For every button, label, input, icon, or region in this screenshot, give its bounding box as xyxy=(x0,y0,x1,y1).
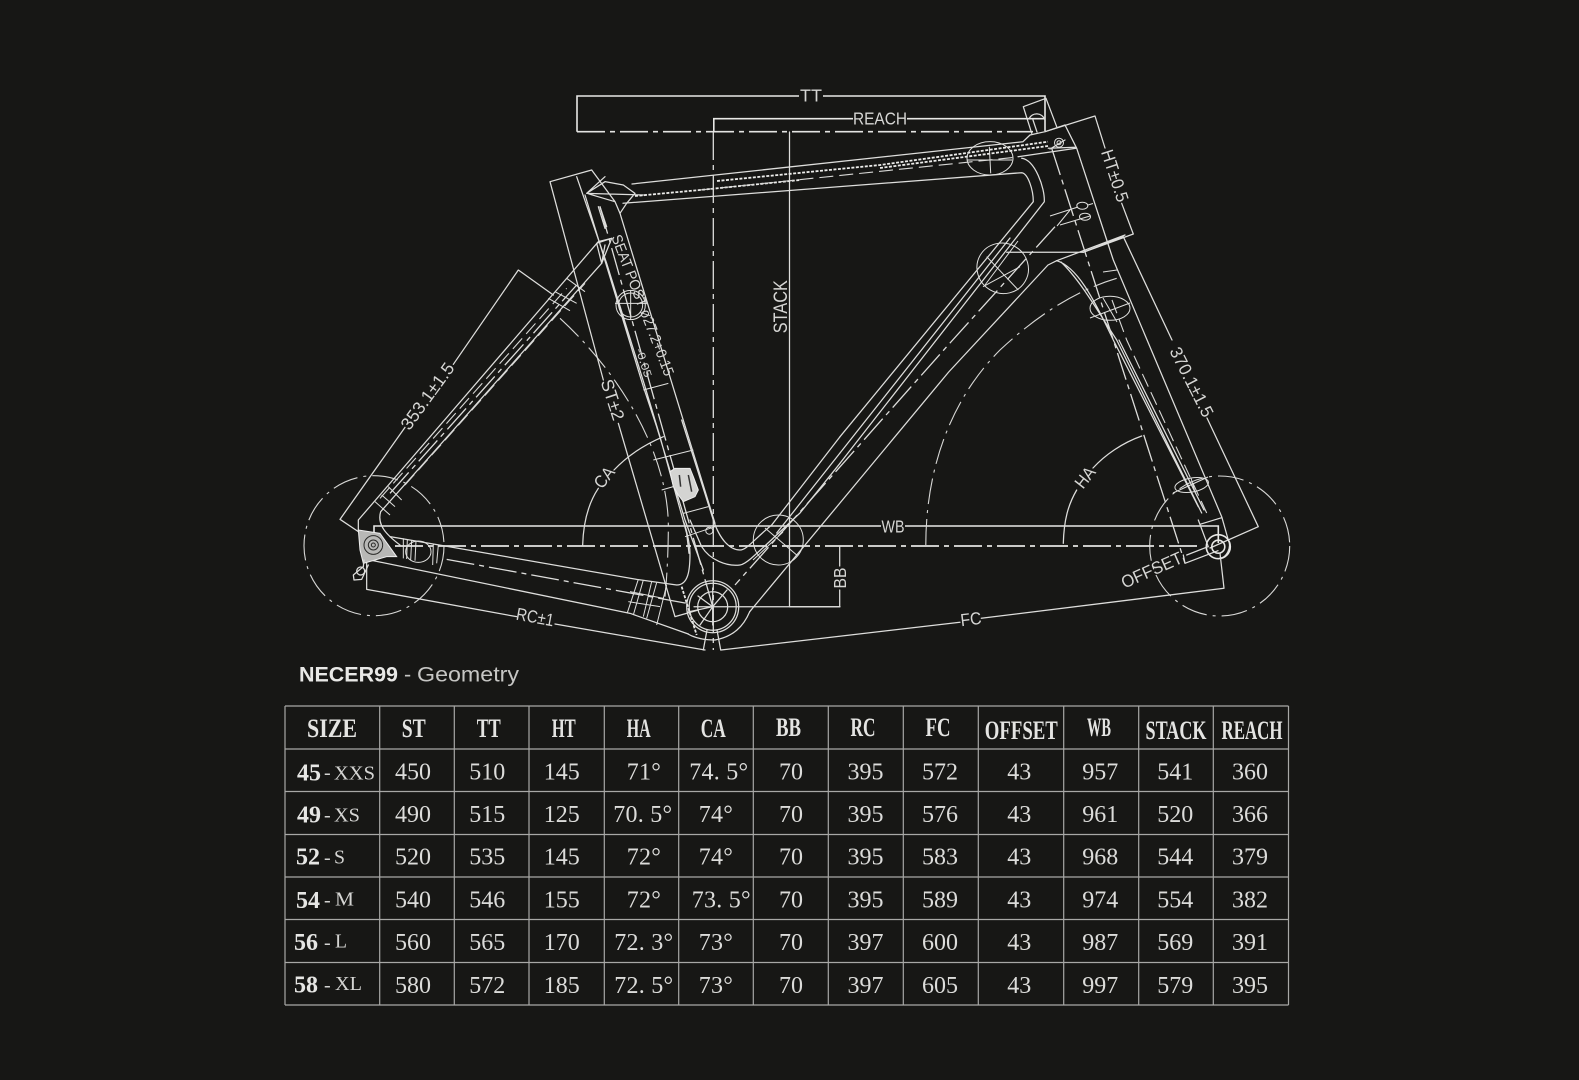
chainring hatch xyxy=(682,587,697,635)
dropout plate xyxy=(358,530,397,563)
heading xyxy=(299,662,519,686)
row 54 M xyxy=(296,888,1268,914)
label: seat post tolerance: -0.05 xyxy=(633,347,653,379)
row 54 M: M xyxy=(335,888,354,910)
front axle rings xyxy=(1206,535,1230,559)
row 52 S: 52 xyxy=(296,844,320,870)
row 54 M: 155 xyxy=(544,888,580,914)
bottle boss xyxy=(670,468,698,502)
head tube right wall xyxy=(1065,125,1229,558)
chain stay centre dashes xyxy=(447,559,687,603)
oval cross lines xyxy=(983,241,1020,290)
row 54 M: - xyxy=(324,890,331,912)
front dropout box xyxy=(1198,518,1222,547)
stem stub xyxy=(1023,98,1057,133)
row 49 XS: 70 xyxy=(779,802,803,828)
row 56 L: 600 xyxy=(922,930,958,956)
heading: NECER99 xyxy=(299,662,398,686)
top tube dimension xyxy=(577,96,1045,132)
row 49 XS: 490 xyxy=(395,802,431,828)
label: STACK: STACK xyxy=(771,280,792,333)
row 56 L: 56 xyxy=(294,930,318,956)
label: FC: FC xyxy=(959,608,983,630)
row 45 XXS: 572 xyxy=(922,760,958,786)
row 58 XL: 395 xyxy=(1232,973,1268,999)
seat stay inner dashes xyxy=(380,283,585,498)
seat stay xyxy=(358,238,612,545)
top tube oval cross xyxy=(967,147,1012,173)
row 52 S: 535 xyxy=(469,844,505,870)
row 54 M: 70 xyxy=(779,888,803,914)
down tube inner wall xyxy=(840,238,1010,453)
row 54 M: 546 xyxy=(469,888,505,914)
row 49 XS: 70. 5° xyxy=(613,802,672,828)
chain stay oval xyxy=(406,541,431,562)
row 52 S: - xyxy=(324,847,331,869)
row 45 XXS: 541 xyxy=(1157,760,1193,786)
row 49 XS: XS xyxy=(334,804,360,826)
row 56 L: 43 xyxy=(1007,930,1031,956)
row 54 M: 554 xyxy=(1157,888,1193,914)
dropout rings xyxy=(364,536,383,554)
fork inner curves and blades xyxy=(1057,261,1204,513)
head tube and fork axis xyxy=(1052,148,1185,563)
label: 370.1: 370.1±1.5 xyxy=(1166,344,1218,420)
row 58 XL: 43 xyxy=(1007,973,1031,999)
label: 353.1: 353.1±1.5 xyxy=(396,359,459,434)
small pivot circle xyxy=(706,527,713,534)
fork lower cross xyxy=(1173,477,1208,493)
header row: OFFSET xyxy=(985,716,1058,745)
row 45 XXS: 45 xyxy=(297,761,321,787)
row 54 M: 54 xyxy=(296,888,320,914)
row 52 S: 43 xyxy=(1007,844,1031,870)
row 45 XXS: 70 xyxy=(779,760,803,786)
row 52 S: 395 xyxy=(848,844,884,870)
fork dashes xyxy=(1112,300,1207,513)
HA angle arc xyxy=(1063,436,1142,543)
row 54 M: 73. 5° xyxy=(692,888,751,914)
row 58 XL: 580 xyxy=(395,973,431,999)
row 56 L: 987 xyxy=(1082,930,1118,956)
crown lines xyxy=(1007,235,1125,261)
row 56 L: L xyxy=(335,931,347,953)
seat tube walls xyxy=(577,177,715,570)
row 54 M: 974 xyxy=(1082,888,1118,914)
boss slots xyxy=(679,475,692,492)
header row: HT xyxy=(552,714,576,743)
down tube third wall xyxy=(750,261,1057,612)
row 58 XL: 572 xyxy=(469,973,505,999)
row 49 XS: 125 xyxy=(544,802,580,828)
stack dimension xyxy=(790,132,840,607)
header row: CA xyxy=(701,714,726,743)
seat tube dimension xyxy=(550,170,698,617)
row 49 XS: 520 xyxy=(1157,802,1193,828)
row 56 L: 391 xyxy=(1232,930,1268,956)
table grid xyxy=(285,706,1288,1005)
bottom tips xyxy=(703,630,721,650)
label: HT: HT±0.5 xyxy=(1097,147,1133,204)
label: WB: WB xyxy=(882,517,904,537)
top tube cable dashed line xyxy=(700,157,1018,190)
row 45 XXS: 71° xyxy=(627,760,661,786)
row 54 M: 72° xyxy=(627,888,661,914)
370.1 dimension upper xyxy=(1123,237,1172,340)
row 58 XL: 58 xyxy=(294,973,318,999)
row 52 S xyxy=(296,844,1268,870)
bottom bracket area xyxy=(682,420,840,650)
HT dimension xyxy=(1045,116,1133,252)
top tube walls xyxy=(623,125,1065,437)
header row: SIZE xyxy=(307,714,357,743)
label: HA: HA xyxy=(1070,462,1100,492)
row 49 XS: 366 xyxy=(1232,802,1268,828)
cable ports xyxy=(1050,202,1093,226)
row 45 XXS: 957 xyxy=(1082,760,1118,786)
label: ST: ST±2 xyxy=(597,377,629,423)
row 56 L: 569 xyxy=(1157,930,1193,956)
axle centre line xyxy=(395,545,1201,547)
down tube lower curve xyxy=(688,612,750,640)
row 52 S: 145 xyxy=(544,844,580,870)
row 49 XS: - xyxy=(324,804,331,826)
row 56 L: 73° xyxy=(699,930,733,956)
row 45 XXS: XXS xyxy=(334,762,375,784)
fork oval cross xyxy=(1090,270,1130,322)
row 49 XS: 576 xyxy=(922,802,958,828)
horizontal top reference line xyxy=(577,131,1033,133)
row 49 XS: 74° xyxy=(699,802,733,828)
label: seat post: SEAT POST ø27.2+0.15 xyxy=(607,232,677,378)
seat stay centre dashes xyxy=(390,285,577,493)
header row: HA xyxy=(627,714,651,743)
header row: RC xyxy=(850,713,876,742)
row 49 XS: 49 xyxy=(297,803,321,829)
row 45 XXS: 360 xyxy=(1232,760,1268,786)
label: OFFSET: OFFSET xyxy=(1118,548,1186,592)
row 58 XL: 579 xyxy=(1157,973,1193,999)
seat tube ticks xyxy=(643,383,715,537)
seat cluster xyxy=(587,170,643,263)
row 56 L: 70 xyxy=(779,930,803,956)
fork lower oval xyxy=(1174,475,1210,495)
row 58 XL: 605 xyxy=(922,973,958,999)
front clearance arc xyxy=(926,278,1117,545)
bb oval xyxy=(753,515,803,565)
row 58 XL: XL xyxy=(335,973,362,995)
row 56 L: 397 xyxy=(848,930,884,956)
bb oval cross xyxy=(753,528,797,560)
row 45 XXS: 450 xyxy=(395,760,431,786)
top tube and head tube xyxy=(623,98,1258,650)
label: RC: RC±1 xyxy=(515,604,556,630)
label: TT: TT xyxy=(800,86,822,106)
row 52 S: 544 xyxy=(1157,844,1193,870)
header row: FC xyxy=(926,713,950,742)
down tube oval xyxy=(968,234,1038,303)
row 56 L: 72. 3° xyxy=(614,930,673,956)
row 54 M: 382 xyxy=(1232,888,1268,914)
label: CA: CA xyxy=(590,462,619,492)
header row xyxy=(307,713,1282,745)
row 58 XL: 397 xyxy=(848,973,884,999)
row 54 M: 395 xyxy=(848,888,884,914)
row 45 XXS: 395 xyxy=(848,760,884,786)
seat tube and rear triangle xyxy=(340,170,715,650)
header row: WB xyxy=(1087,713,1111,742)
row 56 L: - xyxy=(324,932,331,954)
row 58 XL: 70 xyxy=(779,973,803,999)
headset bearing xyxy=(1054,138,1064,147)
row 49 XS: 515 xyxy=(469,802,505,828)
label: BB: BB xyxy=(830,568,850,588)
row 54 M: 43 xyxy=(1007,888,1031,914)
chain stay hatching xyxy=(403,538,667,625)
front wheel circle xyxy=(1150,476,1290,616)
row 45 XXS: 510 xyxy=(469,760,505,786)
row 54 M: 589 xyxy=(922,888,958,914)
top tube cable dotted lines xyxy=(635,142,1048,196)
row 58 XL: 72. 5° xyxy=(614,973,673,999)
row 56 L xyxy=(294,930,1268,956)
frame geometry drawing xyxy=(304,86,1290,650)
353.1 dimension xyxy=(340,270,553,532)
row 58 XL: 997 xyxy=(1082,973,1118,999)
fork oval xyxy=(1090,296,1130,320)
hanger eye xyxy=(357,567,365,575)
row 58 XL xyxy=(294,973,1268,999)
derailleur hanger xyxy=(353,560,368,580)
row 49 XS: 961 xyxy=(1082,802,1118,828)
row 45 XXS: 43 xyxy=(1007,760,1031,786)
FC dimension xyxy=(721,553,1224,650)
row 49 XS: 43 xyxy=(1007,802,1031,828)
header row: REACH xyxy=(1222,716,1282,745)
seat post circle xyxy=(615,290,647,320)
down tube second wall xyxy=(840,158,1044,463)
row 58 XL: 185 xyxy=(544,973,580,999)
header row: BB xyxy=(776,713,801,742)
row 58 XL: - xyxy=(324,974,331,996)
reach dimension xyxy=(714,119,1045,132)
row 45 XXS: - xyxy=(324,762,331,784)
header row: ST xyxy=(402,714,426,743)
row 58 XL: 73° xyxy=(699,973,733,999)
row 52 S: 520 xyxy=(395,844,431,870)
reach centre line xyxy=(712,132,714,650)
row 52 S: 70 xyxy=(779,844,803,870)
offset dimension xyxy=(1183,547,1218,563)
row 56 L: 170 xyxy=(544,930,580,956)
seat tube centre line xyxy=(600,207,713,607)
bottom bracket shell xyxy=(687,581,840,633)
row 52 S: 968 xyxy=(1082,844,1118,870)
chain stay xyxy=(370,522,690,634)
RC dimension xyxy=(367,558,705,650)
row 52 S: 379 xyxy=(1232,844,1268,870)
row 56 L: 565 xyxy=(469,930,505,956)
row 52 S: 72° xyxy=(627,844,661,870)
row 45 XXS: 145 xyxy=(544,760,580,786)
header row: STACK xyxy=(1146,716,1207,745)
heading: Geometry xyxy=(417,662,519,686)
row 52 S: S xyxy=(334,846,345,868)
wheelbase dimension line xyxy=(374,526,1218,543)
head tube top line xyxy=(1018,140,1076,157)
CA angle arc xyxy=(583,437,663,545)
seat stay hatching xyxy=(375,278,585,515)
row 52 S: 74° xyxy=(699,844,733,870)
rear wheel circle xyxy=(304,476,444,616)
rear dropout xyxy=(353,530,397,580)
label: REACH: REACH xyxy=(853,109,907,129)
row 45 XXS xyxy=(297,760,1268,787)
row 49 XS xyxy=(297,802,1268,829)
geometry table xyxy=(285,706,1288,1005)
row 54 M: 540 xyxy=(395,888,431,914)
header row: TT xyxy=(477,714,501,743)
heading: - xyxy=(404,662,411,686)
row 52 S: 583 xyxy=(922,844,958,870)
top tube oval xyxy=(967,142,1013,175)
seat tube to down tube curves xyxy=(682,420,840,565)
row 45 XXS: 74. 5° xyxy=(689,760,748,786)
row 56 L: 560 xyxy=(395,930,431,956)
clearance arc xyxy=(560,318,668,597)
down tube centre dashes xyxy=(735,227,1055,585)
370.1 dimension lower xyxy=(1207,418,1258,548)
row 49 XS: 395 xyxy=(848,802,884,828)
